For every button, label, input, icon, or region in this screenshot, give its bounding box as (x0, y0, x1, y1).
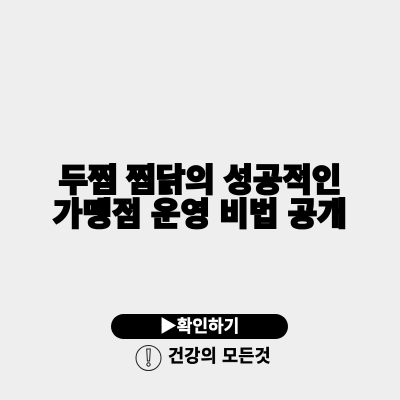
title line 1: 두찜 찜닭의 성공적인 (59, 162, 341, 198)
title line 2: 가맹점 운영 비법 공개 (53, 196, 347, 232)
brand text: 건강의 모든것 (168, 346, 271, 366)
icon: exclamation circle (136, 345, 162, 371)
footer brand (136, 345, 271, 371)
button: confirm: ▶확인하기 (160, 317, 239, 336)
button: confirm (111, 314, 288, 339)
title (52, 162, 347, 232)
